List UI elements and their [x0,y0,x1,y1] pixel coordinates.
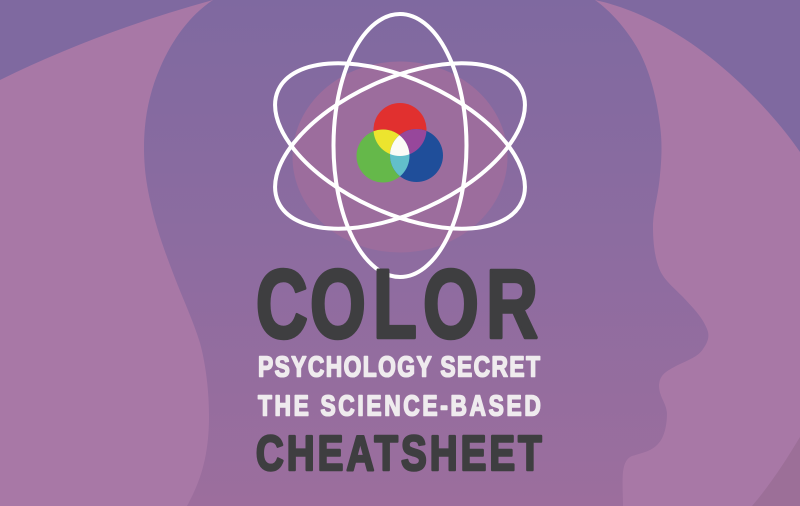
atom orbit: tilted right [250,29,550,263]
subtitle line 1: PSYCHOLOGY SECRET [258,352,540,383]
blue circle [390,129,443,182]
background: top-right corner [595,0,800,152]
purple overlap [390,129,426,154]
yellow overlap [374,130,400,154]
atom orbit: vertical [334,14,466,277]
white overlap [390,135,410,156]
subtitle line 2: THE SCIENCE-BASED [258,391,541,422]
title: COLOR: COLOR [256,251,538,359]
atom icon [250,14,550,277]
green circle [356,130,410,182]
red circle [374,103,426,156]
heading: CHEATSHEET: CHEATSHEET [256,426,542,481]
atom orbit: tilted left [250,29,550,263]
head silhouette [144,0,708,506]
background: top-left corner [0,0,213,80]
icon: RGB colour venn [356,103,443,182]
brain glow circle [292,62,508,252]
background: bottom-right corner [752,437,800,506]
cyan overlap [390,135,410,176]
